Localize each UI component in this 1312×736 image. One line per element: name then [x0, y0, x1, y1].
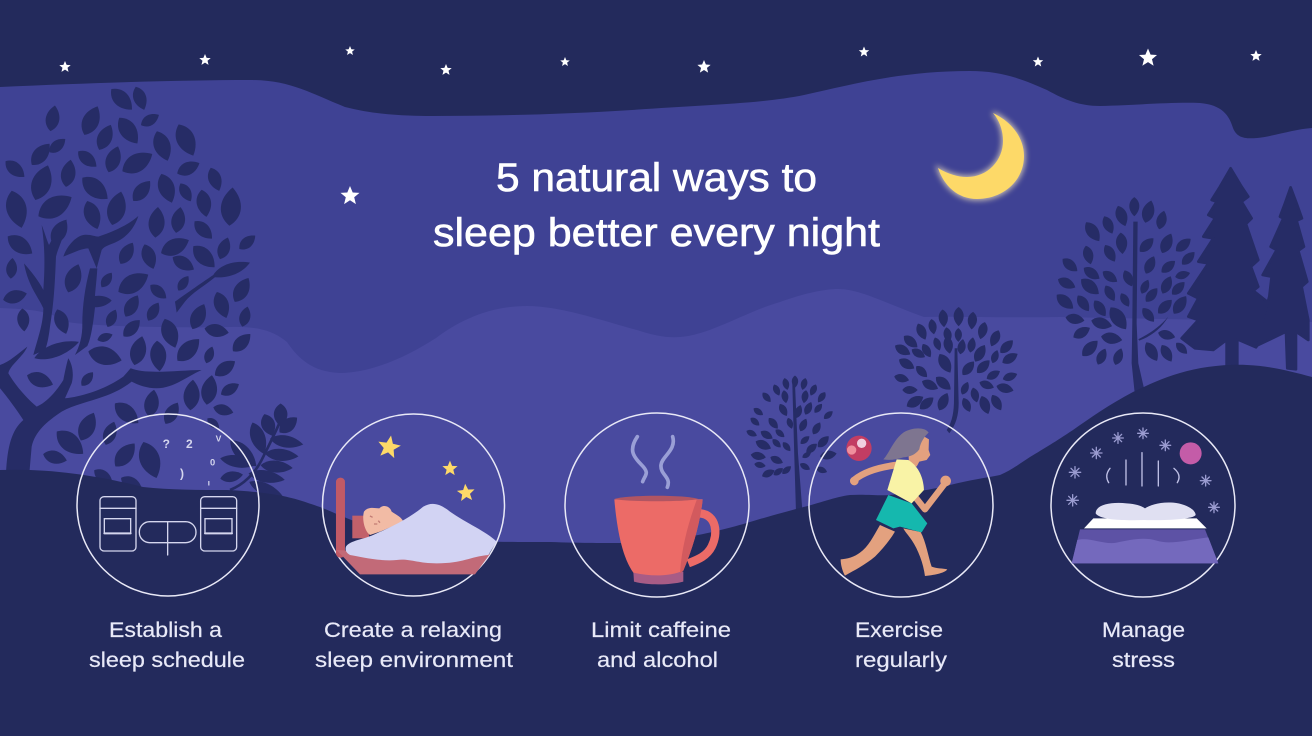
- step labels: sleep schedule: [89, 648, 245, 672]
- step 1: sleep schedule icon: 2: [186, 437, 193, 451]
- step labels: Establish a: [109, 618, 222, 642]
- big tree silhouette: [0, 84, 259, 496]
- step 3: coffee cup icon: [565, 413, 749, 597]
- step 2: relaxing bed icon: [322, 414, 504, 596]
- title: 5 natural ways to: [496, 156, 817, 200]
- tree on the right hill: [1053, 197, 1198, 393]
- step labels: [89, 618, 1185, 672]
- step 1: sleep schedule icon: ?: [163, 437, 170, 451]
- step 5: stress relief bed icon: [1051, 413, 1235, 597]
- step 4: runner icon: [809, 413, 993, 597]
- step labels: and alcohol: [597, 648, 718, 672]
- step labels: Limit caffeine: [591, 618, 731, 642]
- step 1: sleep schedule icon: [77, 414, 259, 596]
- stars: [59, 46, 1262, 204]
- title: sleep better every night: [433, 211, 880, 255]
- ground hills: [0, 365, 1312, 736]
- title: [433, 156, 880, 255]
- middle tree: [893, 307, 1020, 433]
- step labels: Manage: [1102, 618, 1185, 642]
- step labels: Exercise: [855, 618, 943, 642]
- crescent moon: [938, 113, 1024, 199]
- background: lower wave: [0, 289, 1312, 560]
- step 1: sleep schedule icon: ı: [208, 478, 210, 488]
- step 1: sleep schedule icon: V: [216, 433, 222, 443]
- fern silhouette: [219, 403, 304, 503]
- small tree left of runner: [745, 376, 837, 512]
- pine trees: [1182, 168, 1308, 369]
- step labels: sleep environment: [315, 648, 513, 672]
- step labels: Create a relaxing: [324, 618, 502, 642]
- step labels: regularly: [855, 648, 947, 672]
- step 1: sleep schedule icon: 0: [210, 457, 215, 467]
- step 1: sleep schedule icon: ): [180, 466, 184, 480]
- step labels: stress: [1112, 648, 1175, 672]
- background: upper wave: [0, 71, 1312, 400]
